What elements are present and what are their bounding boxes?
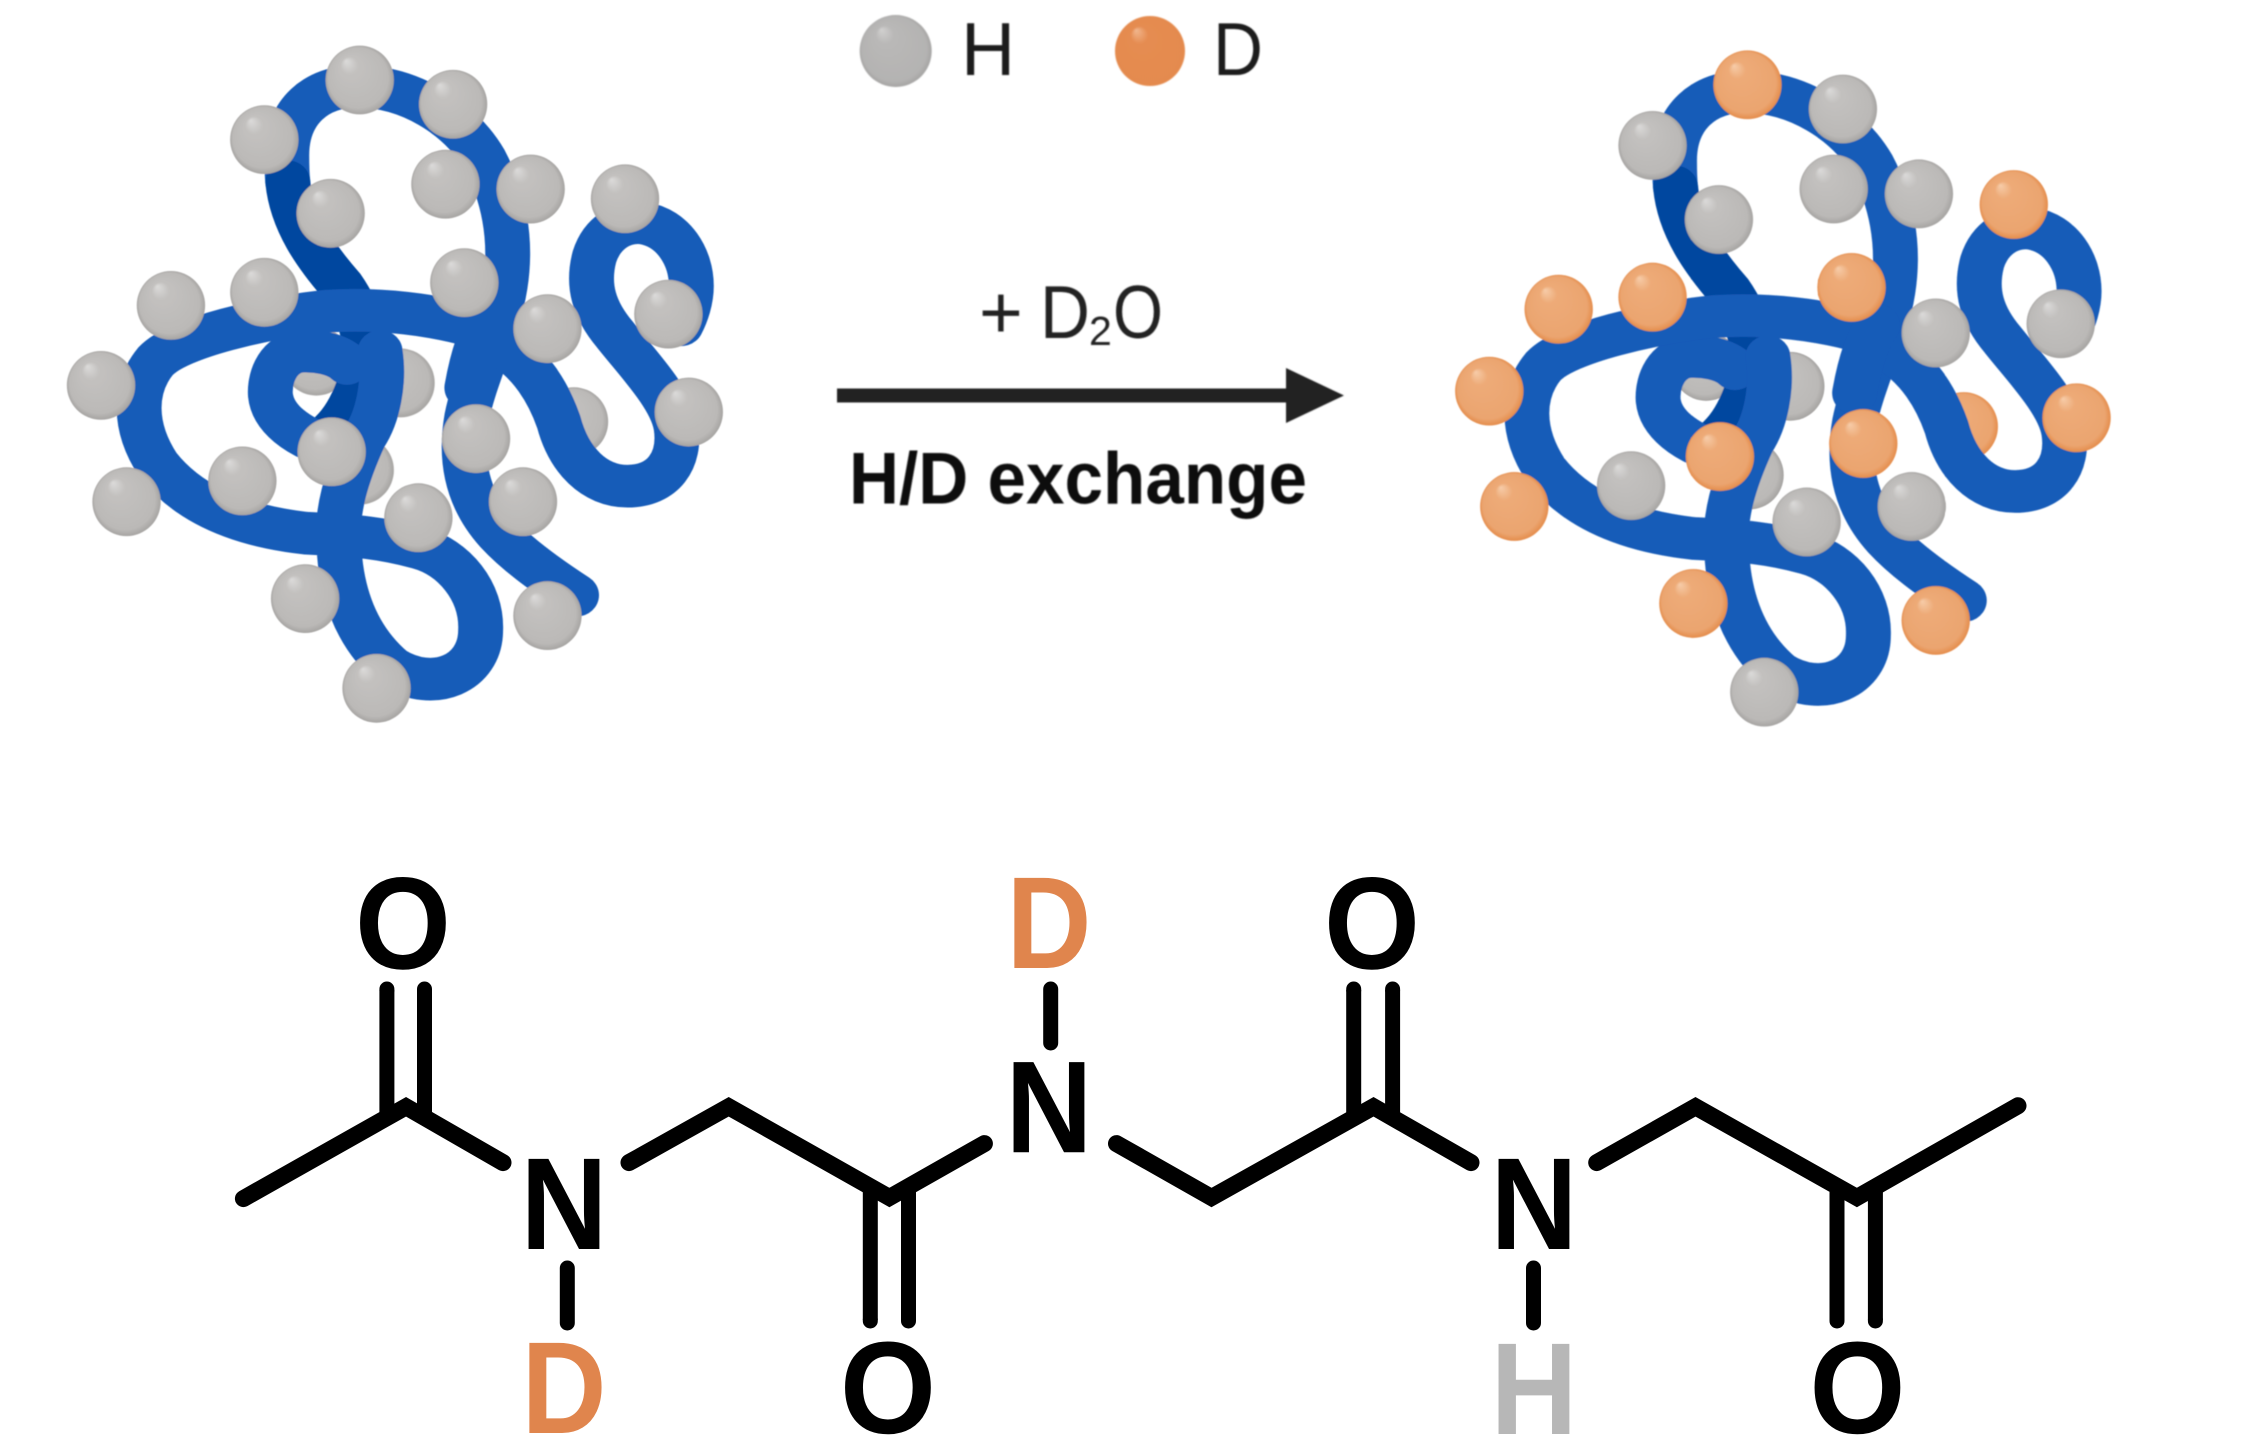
hidden H balls behind strand xyxy=(282,327,608,505)
atom label: O: O xyxy=(1324,850,1420,996)
legend label: H: H xyxy=(961,7,1015,91)
atom label: O: O xyxy=(355,850,451,996)
atom label: N: N xyxy=(520,1130,608,1277)
reaction label: + D2O: + xyxy=(979,270,1023,354)
diagram: polymer after exchange with H and D balls xyxy=(1455,50,2111,727)
legend: H and D xyxy=(860,7,1263,91)
reaction label: H/D exchange: H/D exchange xyxy=(849,438,1307,520)
N-D and N-H bonds xyxy=(567,989,1534,1323)
diagram: polymer before exchange with all H balls xyxy=(67,46,723,723)
carbonyl double bonds xyxy=(387,989,1875,1321)
reaction label: + D2O: 2 xyxy=(1089,308,1112,354)
atom label: N: N xyxy=(1006,1033,1092,1180)
legend label: D: D xyxy=(1213,7,1263,91)
reaction label: + D2O: D xyxy=(1040,270,1090,354)
H balls on strand xyxy=(67,46,723,723)
arrow xyxy=(837,368,1344,423)
backbone bonds xyxy=(243,1106,2018,1199)
atom label: N: N xyxy=(1490,1130,1578,1277)
blue polymer strand xyxy=(139,86,691,679)
chemical structure: peptide backbone xyxy=(243,849,2018,1435)
H and D balls on strand xyxy=(1455,50,2111,727)
reaction label: + D2O: O xyxy=(1113,270,1163,354)
atom label: D on second N: D xyxy=(1006,849,1092,996)
legend icon: H ball xyxy=(860,15,932,87)
legend icon: D ball xyxy=(1115,16,1185,86)
reaction label: + D2O xyxy=(979,270,1163,354)
hidden balls behind strand xyxy=(1672,332,1998,509)
blue polymer strand xyxy=(1527,92,2079,684)
